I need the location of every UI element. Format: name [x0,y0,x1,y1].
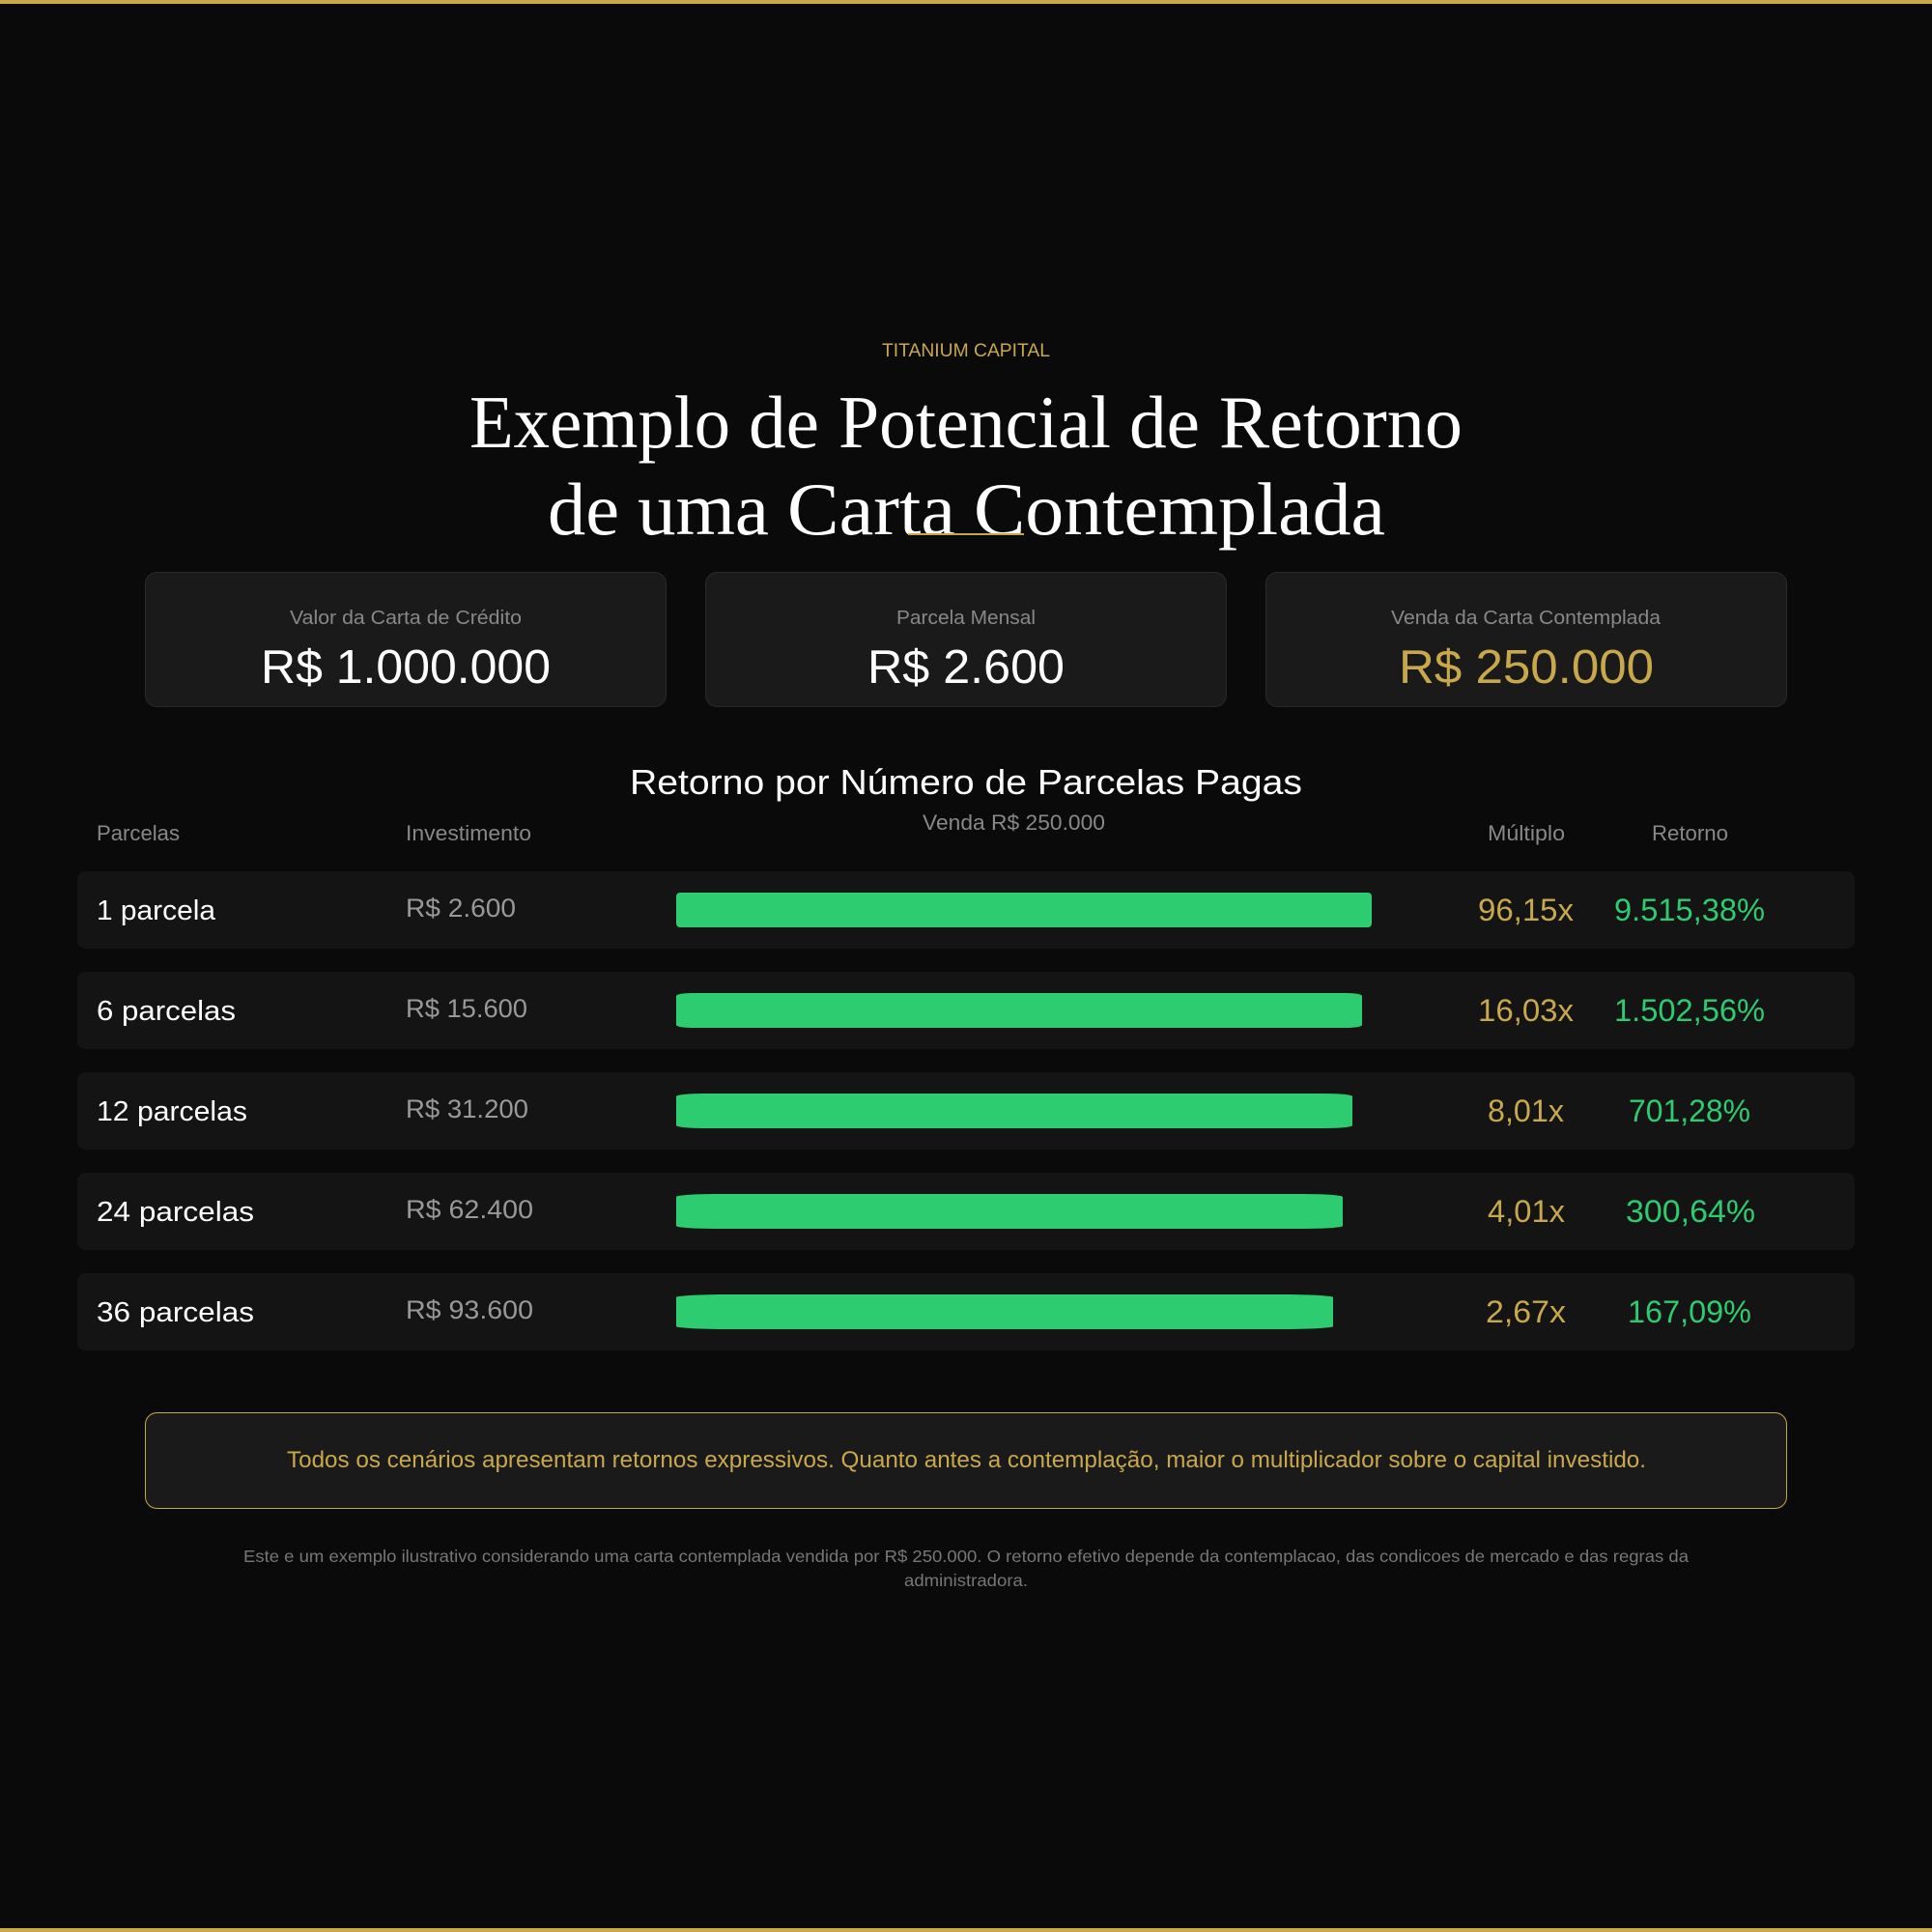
row: 12 parcelas: 701,28% [1629,1094,1750,1128]
row: 24 parcelas [77,1173,1855,1250]
panel: parcela mensal [705,572,1227,707]
panel: valor da carta: R$ 1.000.000 [261,641,551,694]
panel: venda da carta [1265,572,1787,707]
title: uma [638,468,769,551]
row: 36 parcelas [77,1273,1855,1350]
row: 36 parcelas: 167,09% [1628,1294,1751,1329]
table header: Múltiplo [1488,821,1565,845]
table header: Venda R$ 250.000 [923,810,1105,835]
table header: Investimento [406,821,531,845]
bottom gold accent bar [0,1928,1932,1932]
row: 24 parcelas: 4,01x [1488,1194,1565,1229]
panel: valor da carta [145,572,667,707]
panel: parcela mensal: R$ 2.600 [867,641,1065,694]
title: Exemplo [469,381,730,464]
row: 6 parcelas: R$ 15.600 [406,994,527,1023]
row: 24 parcelas: R$ 62.400 [406,1195,533,1224]
table header: Retorno [1652,821,1728,845]
row: 1 parcela: 96,15x [1478,893,1574,927]
table header: Parcelas [97,821,180,845]
row: 36 parcelas: 2,67x [1486,1294,1566,1329]
row: 24 parcelas: 300,64% [1626,1194,1755,1229]
title: Retorno [1219,381,1463,464]
row: 1 parcela [77,871,1855,949]
footnote: Este e um exemplo ilustrativo considerando uma carta contemplada vendida por R$ 250.000. O retorno efetivo depende da contemplacao, das condicoes de mercado e das regras da [243,1547,1689,1566]
callout [145,1412,1787,1509]
callout: Todos os cenários apresentam retornos expressivos. Quanto antes a contemplação, maior o multiplicador sobre o capital investido. [287,1447,1646,1473]
title: Contemplada [974,468,1385,551]
row: 12 parcelas: 12 parcelas [97,1096,247,1127]
row: 6 parcelas [77,972,1855,1049]
row: 1 parcela: R$ 2.600 [406,894,516,923]
row: 12 parcelas [77,1072,1855,1150]
row: 12 parcelas: R$ 31.200 [406,1094,528,1123]
row: 36 parcelas: R$ 93.600 [406,1295,533,1324]
row: 6 parcelas: 6 parcelas [97,996,236,1027]
panel: venda da carta: Venda da Carta Contemplada [1391,608,1662,629]
row: 1 parcela: 9.515,38% [1614,893,1765,927]
title: de [749,381,819,464]
row: 36 parcelas: 36 parcelas [97,1297,254,1328]
title: de [548,468,619,551]
title: Potencial [838,381,1111,464]
panel: venda da carta: R$ 250.000 [1399,641,1654,694]
row: 6 parcelas: 16,03x [1478,993,1574,1028]
panel: valor da carta: Valor da Carta de Crédito [290,608,522,629]
title: de [1129,381,1200,464]
row: 6 parcelas: 1.502,56% [1614,993,1765,1028]
footnote: administradora. [904,1571,1028,1590]
title [469,381,1463,551]
title: Carta [787,468,955,551]
row: 24 parcelas: 24 parcelas [97,1197,254,1228]
row: 12 parcelas: 8,01x [1488,1094,1564,1128]
section heading: Retorno por Número de Parcelas Pagas [630,762,1302,802]
top gold accent bar [0,0,1932,4]
row: 1 parcela: 1 parcela [97,895,216,926]
footnote [243,1547,1689,1590]
brand label: TITANIUM CAPITAL [882,341,1050,361]
table header [97,810,1728,845]
panel: parcela mensal: Parcela Mensal [896,608,1036,629]
